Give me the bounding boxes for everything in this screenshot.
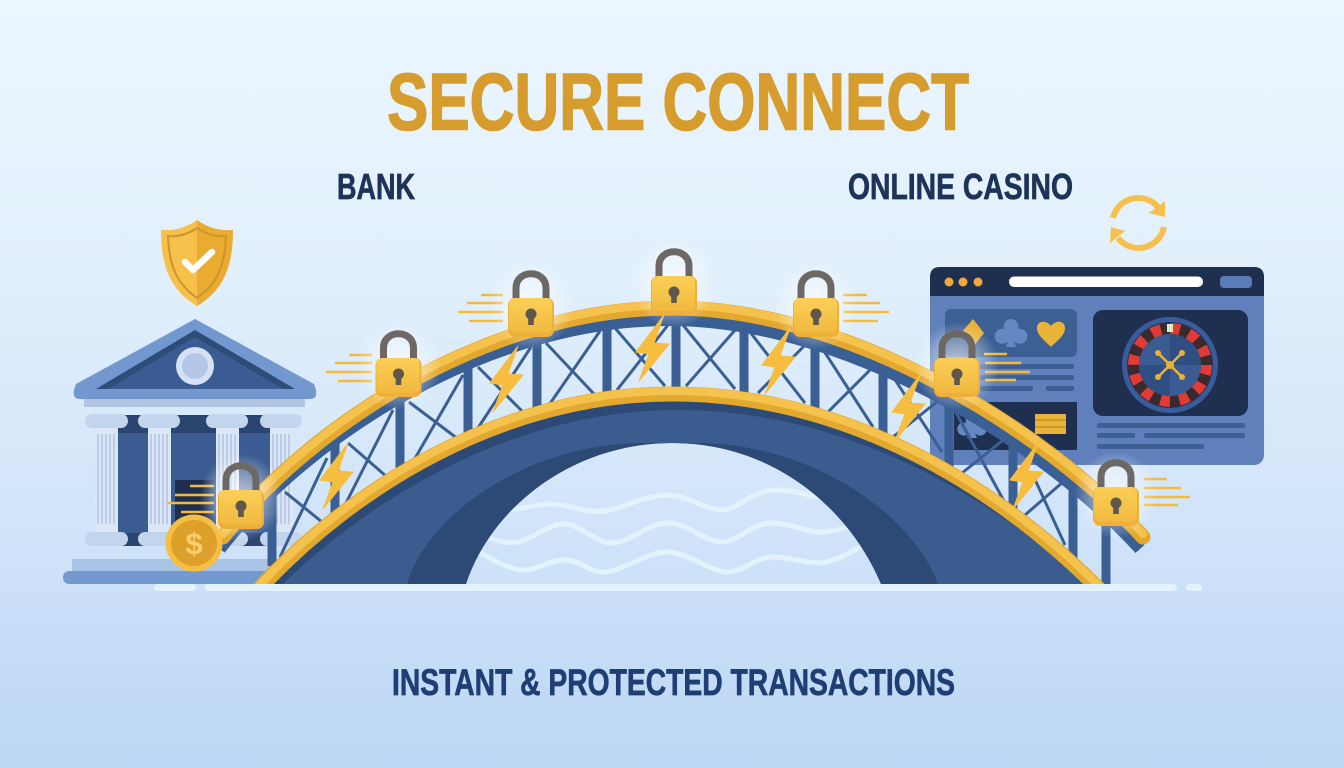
icon: bank building <box>63 319 316 584</box>
bridge upper arch <box>220 305 1143 549</box>
icon: water waves <box>470 490 868 572</box>
text placeholder lines <box>980 364 1245 449</box>
bridge truss <box>272 320 1106 584</box>
panel: card suits <box>945 309 1077 357</box>
padlocks <box>199 240 1158 542</box>
panel: lower game tile <box>954 402 1077 450</box>
ground line <box>154 584 1202 591</box>
icon: refresh arrows <box>1110 198 1165 248</box>
lightning bolts <box>320 315 1043 509</box>
panel: casino browser window <box>930 267 1264 465</box>
panel: roulette wheel <box>1093 310 1248 416</box>
label: bank: BANK <box>337 166 415 207</box>
title: SECURE CONNECT <box>387 58 969 148</box>
icon: dollar coin <box>166 514 222 572</box>
bridge main arch <box>258 391 1106 594</box>
icon: dollar coin: $ <box>185 526 203 561</box>
icon: shield <box>161 220 233 306</box>
label: online casino: ONLINE CASINO <box>848 166 1073 207</box>
caption: INSTANT & PROTECTED TRANSACTIONS <box>392 662 955 703</box>
speed lines <box>167 295 1190 512</box>
